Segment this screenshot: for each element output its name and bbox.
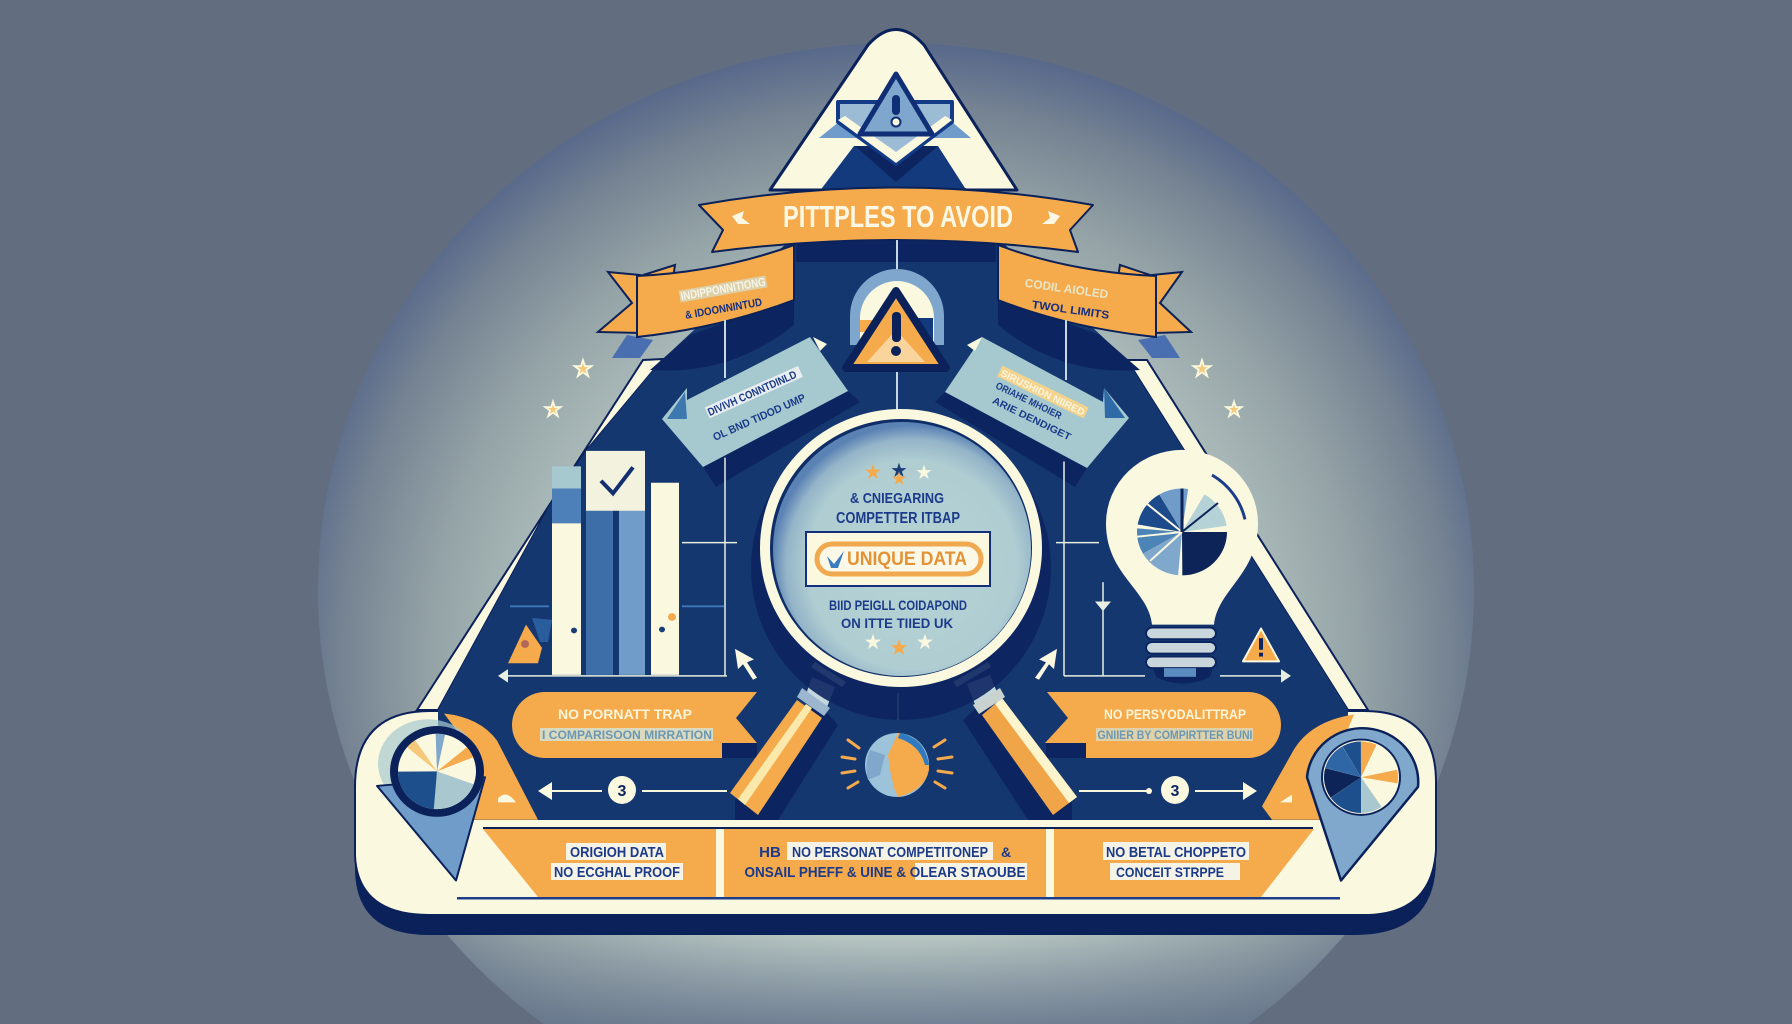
right callout tag	[935, 337, 1129, 487]
left step arrow	[538, 776, 727, 804]
check card	[586, 451, 645, 511]
right map pin	[1307, 728, 1418, 881]
bottom cell 2: HB	[759, 844, 781, 861]
right callout tag: ORIAHE MHOIER	[994, 381, 1064, 422]
left triangle side strip	[417, 359, 663, 710]
shadow under left ribbon	[650, 298, 794, 371]
globe icon	[842, 733, 952, 797]
magnifier handle right	[953, 662, 1077, 815]
stars bottom	[865, 632, 934, 659]
right axis lines	[1056, 462, 1291, 683]
right ribbon	[998, 245, 1191, 337]
gridlines left	[505, 458, 737, 676]
bottom cell 3	[1054, 829, 1314, 897]
main navy triangle panel	[438, 188, 1348, 820]
left orange pod	[444, 714, 538, 820]
blue strip left	[612, 335, 653, 358]
bottom cell 1	[483, 829, 716, 897]
decorative stars left	[544, 356, 593, 421]
bottom frame shadow	[355, 711, 1436, 935]
bottom cell 2: NO PERSONAT COMPETITONEP	[792, 844, 988, 861]
decorative stars right: ★	[1225, 399, 1243, 421]
left pin pie	[410, 745, 464, 798]
left orange label: I COMPARISOON MIRRATION	[542, 728, 712, 742]
lightbulb with pie chart	[1106, 450, 1258, 684]
ribbon text left: INDIPPONNITIONG	[680, 275, 767, 303]
magnifying glass lens: ON ITTE TIIED UK	[841, 615, 953, 631]
bottom orange row	[457, 827, 1340, 900]
arrow: left pointer	[735, 649, 757, 680]
bottom cell 3: CONCEIT STRPPE	[1116, 864, 1224, 880]
ribbon text right	[1021, 276, 1113, 322]
stars top: ★	[916, 463, 932, 482]
bar 4	[651, 483, 679, 675]
title banner	[699, 188, 1093, 252]
right orange label	[1045, 692, 1281, 758]
ribbon text left: & IDOONNINTUD	[684, 297, 763, 322]
left callout tag	[662, 337, 860, 487]
left orange label	[512, 692, 757, 758]
small orange tag	[508, 625, 542, 663]
magnifier handle left	[730, 662, 846, 815]
left step arrow: 3	[618, 783, 627, 800]
left orange label: NO PORNATT TRAP	[558, 706, 692, 722]
left ribbon	[598, 245, 794, 337]
blue strip right	[1138, 335, 1180, 358]
bottom cell 2	[724, 829, 1046, 897]
left callout tag: OL BND TIDOD UMP	[711, 392, 808, 444]
bulb base	[1150, 659, 1216, 684]
ribbon text right: CODIL AIOLED	[1024, 276, 1109, 302]
stars bottom: ★	[917, 632, 934, 652]
right step arrow	[1079, 776, 1257, 804]
title text: PITTPLES TO AVOID	[783, 199, 1013, 234]
right step arrow: 3	[1171, 783, 1180, 800]
decorative stars right	[1192, 356, 1243, 421]
ribbon text right: TWOL LIMITS	[1031, 299, 1110, 322]
bulb pie chart	[1151, 502, 1213, 562]
bottom frame	[355, 711, 1436, 915]
ribbon text left	[679, 274, 771, 322]
right triangle side strip	[1127, 360, 1368, 710]
right callout tag: SIRUSHIDN NIIRED	[999, 368, 1086, 418]
stars top	[865, 461, 932, 488]
magnifying glass lens: COMPETTER ITBAP	[836, 510, 960, 527]
arrow: right pointer	[1035, 649, 1057, 680]
stars top: ★	[892, 471, 907, 488]
stars bottom: ★	[890, 638, 908, 659]
bottom cell 2: ONSAIL PHEFF & UINE & OLEAR STAOUBE	[744, 864, 1026, 881]
decorative stars left: ★	[573, 356, 593, 381]
bottom cell 1: ORIGIOH DATA	[570, 844, 664, 861]
icon: central warning triangle with arch	[846, 269, 946, 368]
stars bottom: ★	[865, 632, 882, 652]
decorative stars right: ★	[1192, 356, 1212, 381]
left callout tag: DIVIVH CONNTDINLD	[706, 369, 799, 419]
right pin pie	[1335, 752, 1387, 802]
right orange label: GNIIER BY COMPIRTTER BUNI	[1098, 728, 1252, 742]
banner small arrow right	[1042, 211, 1060, 224]
stars top: ★	[865, 462, 882, 482]
bottom cell 1: NO ECGHAL PROOF	[554, 864, 680, 881]
bottom glow fade	[400, 870, 1392, 1024]
shadow under right ribbon	[998, 298, 1140, 371]
icon: top warning diamond	[819, 74, 971, 188]
center vertical connector	[725, 240, 1066, 720]
top triangle peak	[770, 30, 1017, 190]
magnifying glass lens: UNIQUE DATA	[847, 549, 967, 570]
bottom cell 3: NO BETAL CHOPPETO	[1106, 844, 1246, 861]
unique data box	[806, 532, 990, 586]
decorative stars left: ★	[544, 399, 562, 421]
stars top: ★	[891, 461, 907, 480]
magnifier handle shadows	[735, 700, 1072, 820]
icon: small warning	[1243, 629, 1279, 661]
magnifying glass lens	[751, 409, 1051, 720]
bottom cell 2: &	[1001, 844, 1011, 860]
right orange label: NO PERSYODALITTRAP	[1104, 706, 1246, 722]
left map pin	[377, 719, 485, 881]
right callout tag: ARIE DENDIGET	[990, 396, 1072, 443]
shadow band under title	[796, 240, 996, 262]
right orange pod	[1262, 714, 1354, 820]
bar 3	[619, 507, 645, 675]
bar 2	[586, 507, 613, 675]
lens body text: BIID PEIGLL COIDAPOND	[829, 597, 967, 613]
left bar chart	[498, 451, 737, 683]
lens heading: & CNIEGARING	[850, 490, 944, 507]
banner small arrow left	[732, 211, 750, 224]
background glow circle	[318, 43, 1474, 1024]
bar 1	[552, 466, 581, 489]
